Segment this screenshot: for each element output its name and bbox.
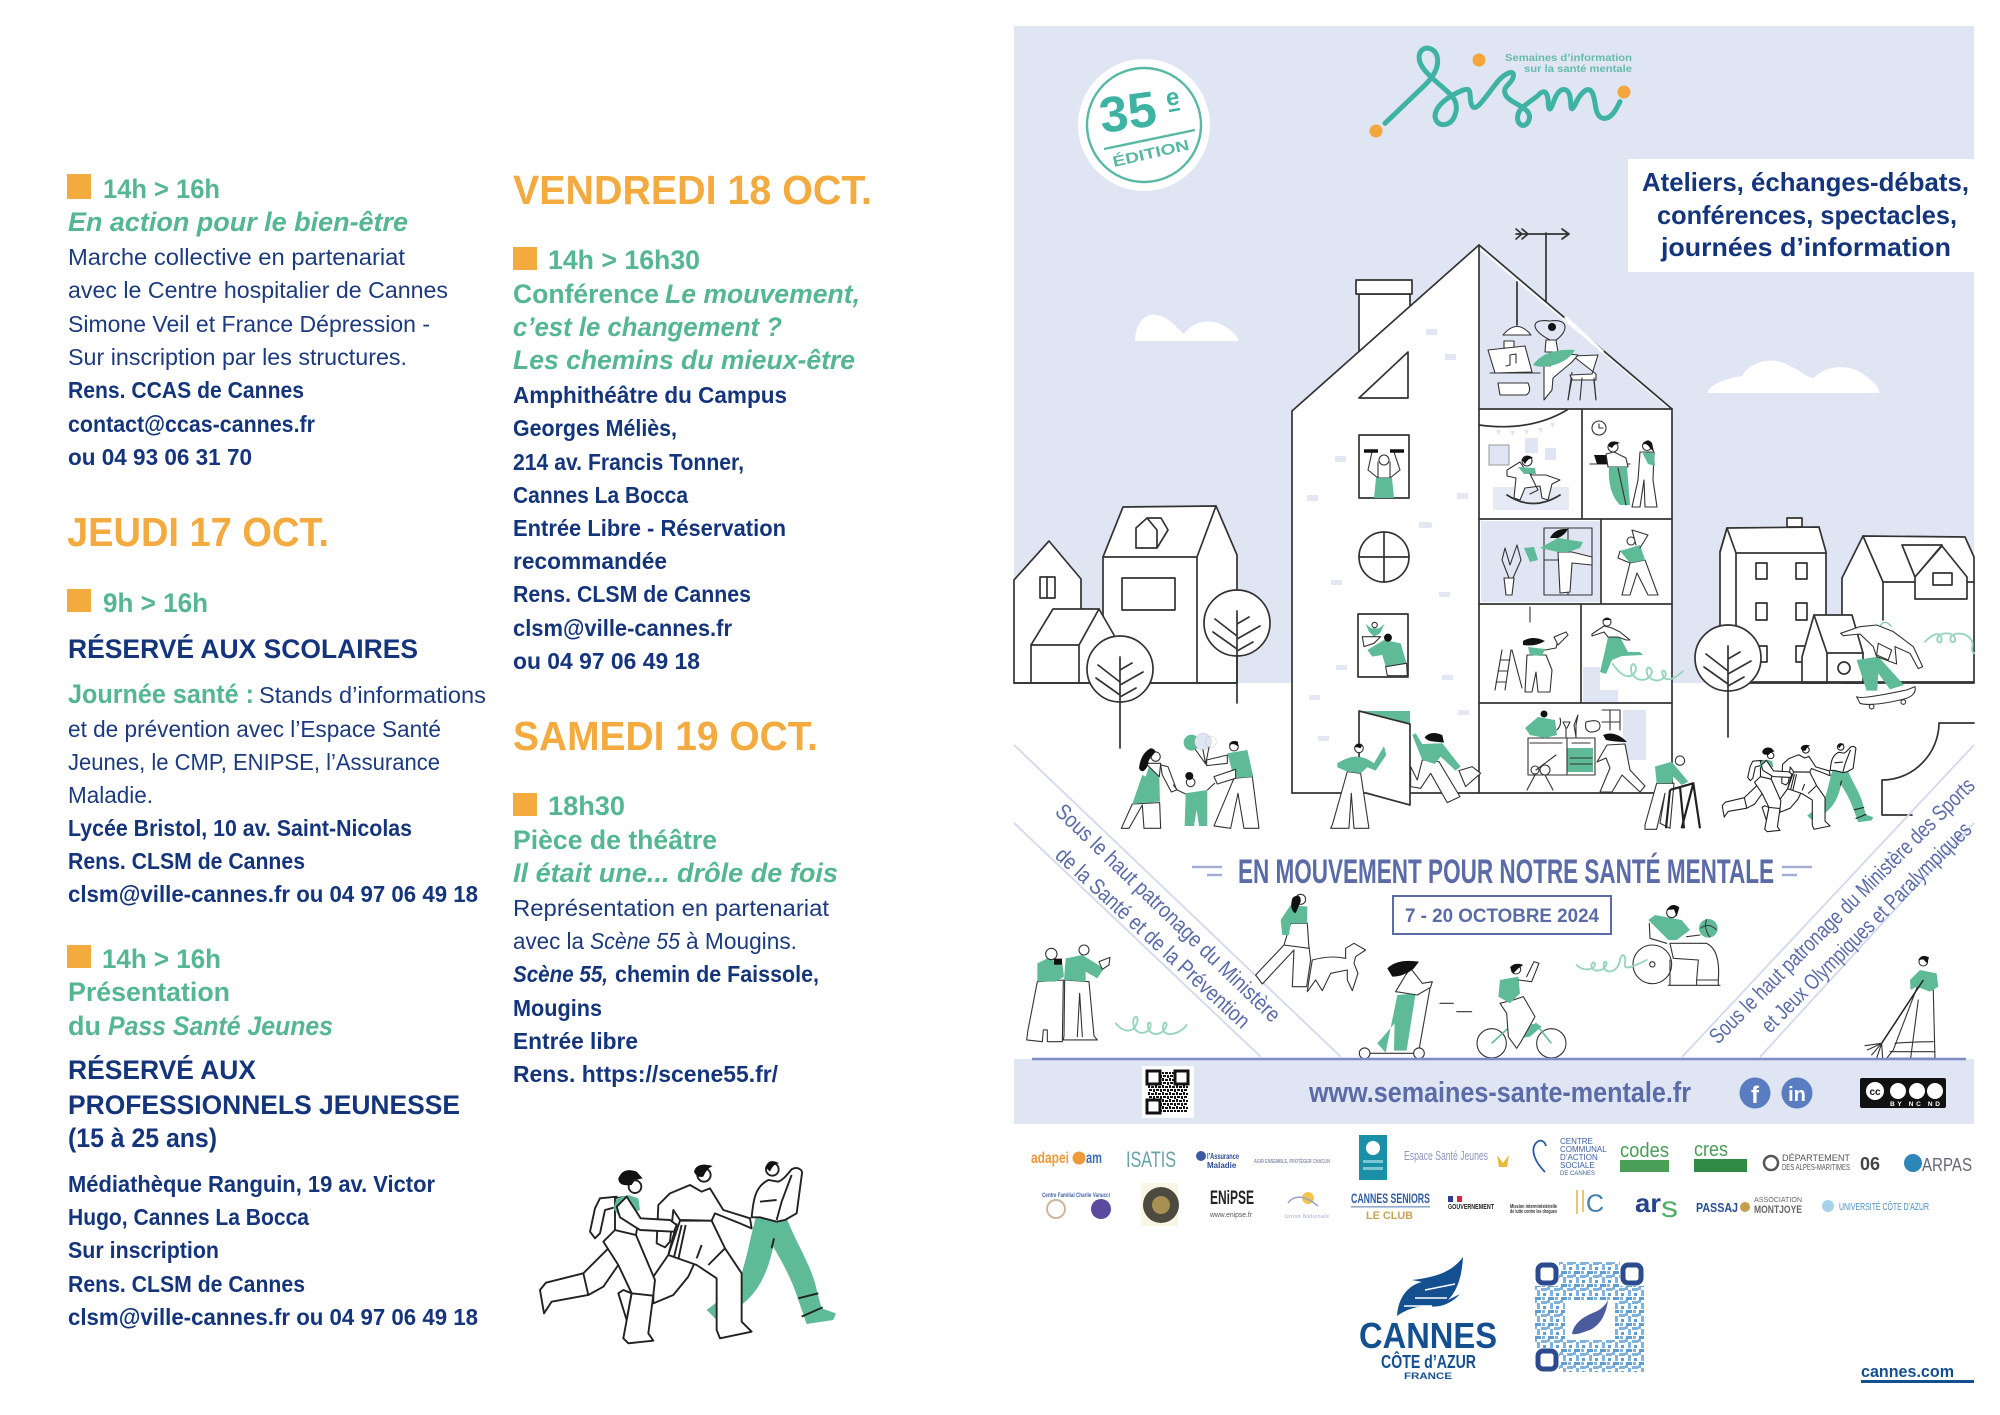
event: conférence: c’est le changement ? (513, 312, 782, 342)
person running with bag (1411, 733, 1481, 803)
room: rocking horse (1479, 410, 1567, 504)
logo: centre communal: COMMUNAL (1560, 1145, 1607, 1154)
person sweeping (1865, 956, 1938, 1058)
logo: assurance maladie: l’Assurance (1207, 1152, 1239, 1161)
antenna (1516, 229, 1569, 302)
room: kitchen (1525, 710, 1645, 792)
event: pass santé jeunes: Sur inscription (68, 1237, 219, 1263)
room: runner (1592, 618, 1643, 674)
logo: assurance maladie: Maladie (1207, 1161, 1237, 1170)
panel: programme middle column (513, 167, 872, 1343)
logo: cannes côte d'azur: CÔTE d’AZUR (1381, 1351, 1476, 1372)
woman (1121, 748, 1177, 828)
event: pièce de théâtre: Scène 55 (590, 928, 680, 954)
old man with walker (1645, 756, 1700, 829)
door (1359, 711, 1410, 805)
callout: ateliers: Ateliers, échanges-débats, (1642, 167, 1969, 197)
logo: ars (1635, 1188, 1678, 1224)
logo: cannes seniors: LE CLUB (1366, 1210, 1413, 1222)
logo: codes (1620, 1140, 1669, 1172)
person walking dog (1256, 894, 1366, 992)
logo: arpas (1904, 1154, 1972, 1175)
event: pass santé jeunes: (15 à 25 ans) (68, 1123, 217, 1153)
event: pass santé jeunes: Présentation (68, 977, 230, 1007)
logo: espace santé jeunes (1404, 1148, 1509, 1167)
clouds (1135, 315, 1879, 393)
logo: espace santé jeunes: Espace Santé Jeunes (1404, 1148, 1488, 1163)
logo: assurance maladie: AGIR ENSEMBLE, PROTÉGER CHACUN (1254, 1157, 1330, 1165)
event: pièce de théâtre: avec la (513, 928, 584, 954)
window: child lift (1358, 614, 1408, 677)
event: pièce de théâtre: 18h30 (548, 791, 625, 821)
event: conférence (513, 245, 860, 674)
event: pièce de théâtre: Rens. https://scene55.fr/ (513, 1061, 779, 1087)
logo: cannes côte d'azur: FRANCE (1404, 1371, 1452, 1381)
logo: département 06: DES ALPES-MARITIMES (1782, 1163, 1850, 1172)
event: conférence: Entrée Libre - Réservation (513, 515, 786, 541)
event: pass santé jeunes: Médiathèque Ranguin, 19 av. Victor (68, 1171, 435, 1197)
logo: centre communal (1533, 1137, 1607, 1177)
event: marche collective: Sur inscription par les structures. (68, 344, 407, 370)
event: marche collective (67, 174, 448, 470)
wheelchair user (1633, 905, 1720, 985)
partner logos row 2 (1042, 1183, 1929, 1226)
logo: SISM: sur la santé mentale (1524, 63, 1632, 75)
event: marche collective: Rens. CCAS de Cannes (68, 377, 304, 403)
badge: creative commons (1860, 1078, 1946, 1108)
event: pass santé jeunes: Pass Santé Jeunes (108, 1011, 333, 1041)
badge: creative commons: cc (1869, 1087, 1881, 1098)
man (1207, 741, 1259, 828)
logo: seal (1141, 1183, 1179, 1226)
url: www.semaines-sante-mentale.fr (1308, 1077, 1691, 1109)
logo: université côte d'azur (1822, 1200, 1929, 1213)
event: conférence: Le mouvement, (665, 279, 860, 309)
attic (1480, 250, 1668, 408)
logo: cloud sun (1285, 1192, 1329, 1220)
room: painter (1495, 607, 1568, 692)
logo: gouvernement: GOUVERNEMENT (1448, 1204, 1495, 1211)
logo: ars: s (1661, 1191, 1678, 1224)
scribble: left spring (1116, 1017, 1187, 1034)
event: marche collective: contact@ccas-cannes.fr (68, 411, 315, 437)
event: pass santé jeunes: du (68, 1011, 101, 1041)
logo: département 06: 06 (1860, 1154, 1880, 1174)
logo: cannes seniors (1351, 1190, 1430, 1222)
neighbour houses left (1014, 506, 1270, 748)
event: journée santé: RÉSERVÉ AUX SCOLAIRES (68, 633, 418, 664)
event: pièce de théâtre: Mougins (513, 995, 602, 1021)
event: conférence: clsm@ville-cannes.fr (513, 615, 732, 641)
event: journée santé: et de prévention avec l’Espace Santé (68, 716, 441, 742)
ground line (1032, 1058, 1966, 1060)
badge: 35e édition: e (1164, 83, 1181, 112)
logo: gouvernement (1448, 1196, 1557, 1215)
text: patronage santé: Sous le haut patronage du Ministère (1051, 799, 1286, 1027)
logo: passaj montjoye: ASSOCIATION (1754, 1197, 1802, 1204)
room: stretching figure (1618, 530, 1658, 595)
callout: ateliers (1628, 159, 1974, 272)
child (1173, 772, 1215, 826)
room: watering plants (1502, 528, 1592, 595)
logo: SISM (1370, 48, 1632, 138)
person on scooter (1359, 961, 1432, 1059)
logo: passaj montjoye: MONTJOYE (1754, 1204, 1802, 1216)
event: conférence: Conférence (513, 279, 659, 309)
event: journée santé: Journée santé : (68, 679, 254, 709)
logo: cloud sun: Union Nationale (1285, 1214, 1329, 1220)
icon: facebook (1740, 1078, 1770, 1109)
three joggers (1722, 743, 1873, 832)
logo: centre familial: Centre Familial Charlie Vanucci (1042, 1193, 1110, 1199)
wing (1397, 1257, 1463, 1316)
event: pass santé jeunes: Rens. CLSM de Cannes (68, 1271, 305, 1297)
room lavender fills (1481, 521, 1600, 602)
logo: centre familial (1042, 1193, 1111, 1219)
wall bricks (1307, 329, 1469, 741)
scribble: skater spring (1925, 633, 1974, 653)
ground white area (1014, 683, 1974, 1059)
event: conférence: Amphithéâtre du Campus (513, 382, 787, 408)
event: journée santé: Lycée Bristol, 10 av. Saint-Nicolas (68, 815, 412, 841)
logo: cres (1694, 1139, 1747, 1172)
logo: département 06 (1764, 1153, 1880, 1174)
attic window (1359, 352, 1408, 398)
event: pièce de théâtre: Entrée libre (513, 1028, 638, 1054)
logo: adapei am: am (1086, 1150, 1102, 1167)
cyclist (1440, 962, 1566, 1058)
panel: programme left column (67, 174, 486, 1330)
callout: ateliers: journées d’information (1660, 232, 1951, 262)
event: pièce de théâtre (513, 791, 838, 1087)
icon: linkedin (1782, 1078, 1812, 1108)
people: family with balloons (1121, 733, 1259, 828)
panel: poster SISM (1014, 26, 1980, 1124)
logo: icc: C (1586, 1190, 1604, 1218)
window: weights (1359, 435, 1409, 498)
event: pièce de théâtre: Pièce de théâtre (513, 825, 717, 855)
event: journée santé: 9h > 16h (103, 588, 208, 618)
main house (1292, 229, 1683, 805)
event: pièce de théâtre: à Mougins. (686, 928, 797, 954)
logo: ars: ar (1635, 1188, 1661, 1218)
text: patronage santé: de la Santé et de la Prévention (1051, 842, 1255, 1033)
scribble: wheelchair spring (1577, 955, 1647, 971)
date box: 7 - 20 OCTOBRE 2024 (1405, 906, 1599, 927)
logo: codes: codes (1620, 1140, 1669, 1162)
badge: creative commons: BY NC ND (1890, 1101, 1940, 1108)
logo: cannes côte d'azur (1359, 1257, 1497, 1381)
skater (1841, 622, 1923, 709)
event: pass santé jeunes: 14h > 16h (102, 944, 221, 974)
event: pièce de théâtre: Il était une... drôle de fois (513, 858, 838, 888)
event: pass santé jeunes: PROFESSIONNELS JEUNESSE (68, 1090, 460, 1120)
event: journée santé (67, 588, 486, 907)
logo: isatis: ISATIS (1126, 1147, 1176, 1172)
heading: vendredi 18 oct: VENDREDI 18 OCT. (513, 167, 872, 213)
logo: enipse (1209, 1188, 1254, 1219)
logo: centre communal: SOCIALE (1560, 1161, 1595, 1170)
person at door (1331, 744, 1386, 828)
logo: centre communal: DE CANNES (1560, 1171, 1595, 1177)
scribble: room spring (1613, 664, 1683, 680)
logo: passaj montjoye (1696, 1197, 1802, 1216)
icon: linkedin: in (1788, 1084, 1806, 1106)
qr code cannes (1535, 1262, 1644, 1372)
illustration: three runners (540, 1161, 836, 1343)
logo: enipse: www.enipse.fr (1209, 1212, 1253, 1219)
event: pass santé jeunes: Hugo, Cannes La Bocca (68, 1204, 309, 1230)
event: pièce de théâtre: chemin de Faissole, (615, 961, 819, 987)
event: journée santé: Rens. CLSM de Cannes (68, 848, 305, 874)
logo: assurance maladie (1196, 1151, 1330, 1170)
poster background (1014, 26, 1974, 1124)
logo: département 06: DÉPARTEMENT (1782, 1153, 1850, 1163)
logo: centre communal: CENTRE (1560, 1137, 1593, 1146)
people: couple (1027, 945, 1110, 1042)
round window (1359, 532, 1409, 582)
logo: passaj montjoye: PASSAJ (1696, 1200, 1738, 1215)
logo: adapei am: adapei (1031, 1150, 1069, 1167)
callout: ateliers: conférences, spectacles, (1657, 200, 1957, 230)
logo: arpas: ARPAS (1922, 1155, 1972, 1175)
logo: gouvernement: de lutte contre les drogues (1510, 1209, 1557, 1215)
logo: cannes côte d'azur: CANNES (1359, 1315, 1497, 1356)
partner logos row 1 (1031, 1135, 1972, 1180)
logo: cannes seniors: CANNES SENIORS (1351, 1190, 1430, 1206)
event: pièce de théâtre: Représentation en partenariat (513, 895, 830, 921)
house body (1292, 245, 1672, 793)
badge: 35e édition: 35 (1096, 81, 1160, 144)
event: marche collective: Marche collective en partenariat (68, 244, 406, 270)
event: conférence: 214 av. Francis Tonner, (513, 449, 744, 475)
event: conférence: Georges Méliès, (513, 415, 677, 441)
logo: gouvernement: Mission interministérielle (1510, 1204, 1557, 1210)
event: conférence: 14h > 16h30 (548, 245, 700, 275)
event: conférence: Les chemins du mieux-être (513, 345, 855, 375)
event: marche collective: avec le Centre hospitalier de Cannes (68, 277, 448, 303)
event: pass santé jeunes (67, 944, 478, 1330)
chimney (1356, 280, 1412, 356)
neighbour houses right (1695, 518, 1974, 815)
event: conférence: Rens. CLSM de Cannes (513, 581, 751, 607)
badge: 35e édition: ÉDITION (1111, 137, 1191, 171)
event: conférence: recommandée (513, 548, 667, 574)
event: journée santé: clsm@ville-cannes.fr ou 04 97 06 49 18 (68, 881, 478, 907)
event: conférence: Cannes La Bocca (513, 482, 688, 508)
footer strip (1142, 1066, 1946, 1118)
heading: samedi 19 oct: SAMEDI 19 OCT. (513, 713, 818, 759)
event: conférence: ou 04 97 06 49 18 (513, 648, 700, 674)
badge: 35e édition (1078, 59, 1210, 191)
logo: icc (1577, 1190, 1604, 1218)
event: journée santé: Maladie. (68, 782, 153, 808)
logo: caf (1359, 1135, 1387, 1180)
qr code (1142, 1066, 1194, 1118)
event: pièce de théâtre: Scène 55, (513, 961, 608, 987)
event: pass santé jeunes: clsm@ville-cannes.fr ou 04 97 06 49 18 (68, 1304, 478, 1330)
icon: facebook: f (1751, 1082, 1760, 1109)
logo: université côte d'azur: UNIVERSITÉ CÔTE D’AZUR (1839, 1200, 1929, 1213)
heading: jeudi 17 oct: JEUDI 17 OCT. (67, 509, 329, 555)
event: journée santé: Jeunes, le CMP, ENIPSE, l’Assurance (68, 749, 440, 775)
event: pass santé jeunes: RÉSERVÉ AUX (68, 1054, 256, 1085)
event: marche collective: En action pour le bien-être (68, 207, 408, 237)
event: marche collective: 14h > 16h (103, 174, 220, 204)
link: cannes.com: cannes.com (1861, 1362, 1954, 1381)
attic: ballerina room (1488, 282, 1598, 400)
event: marche collective: ou 04 93 06 31 70 (68, 444, 252, 470)
event: journée santé: Stands d’informations (259, 682, 486, 708)
room: office pair (1590, 421, 1657, 507)
logo: SISM: Semaines d’information (1505, 52, 1632, 64)
logo: enipse: ENiPSE (1210, 1188, 1254, 1209)
logo: cres: cres (1694, 1139, 1728, 1161)
date box (1393, 896, 1611, 934)
event: marche collective: Simone Veil et France Dépression - (68, 311, 430, 337)
logo: centre communal: D’ACTION (1560, 1153, 1598, 1162)
diagonal guides (1014, 745, 1974, 1057)
